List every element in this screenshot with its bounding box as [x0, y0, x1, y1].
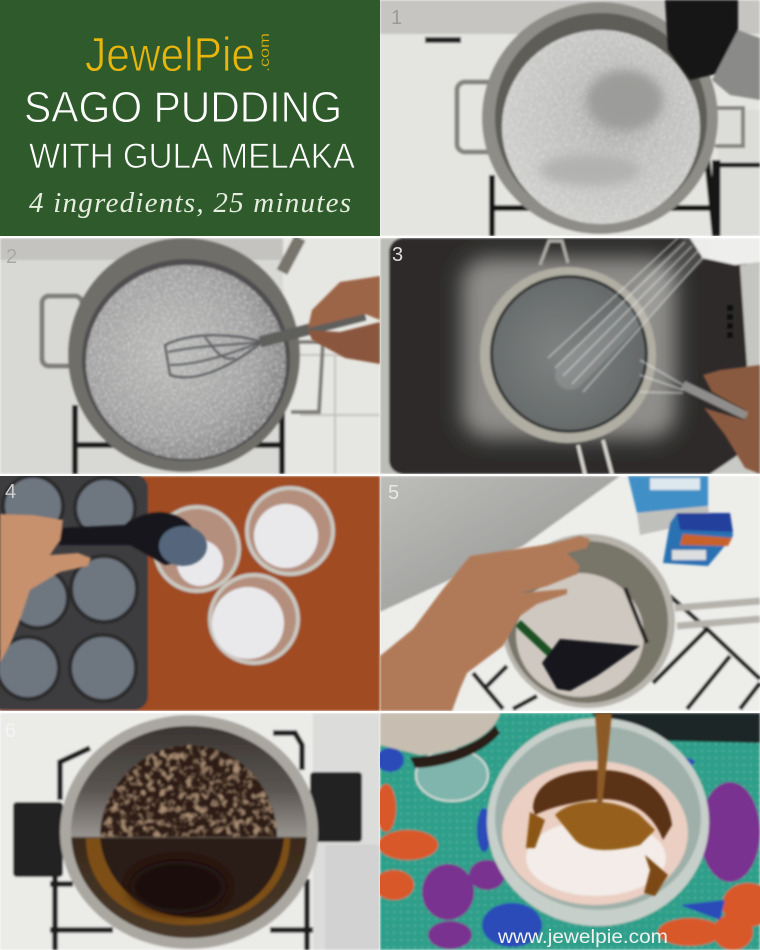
website url: www.jewelpie.com — [497, 927, 668, 948]
panel: step 1 photo — [380, 0, 760, 236]
caramel syrup pour — [526, 713, 672, 896]
hand — [380, 536, 590, 711]
panel: title — [0, 0, 380, 236]
pandan leaves — [518, 623, 640, 691]
water stream — [548, 238, 705, 393]
icon: step number 4: 4 — [5, 481, 16, 503]
icon: step number 2: 2 — [6, 246, 17, 268]
spoon and hand — [0, 512, 207, 663]
heading: sago pudding: SAGO PUDDING — [24, 83, 342, 132]
panel: step 4 photo — [0, 476, 380, 711]
icon: step number 3: 3 — [392, 244, 403, 266]
brand logo: JewelPie — [85, 29, 255, 82]
icon: step number 5: 5 — [388, 482, 399, 504]
brand logo: .com — [256, 33, 272, 72]
panel: step 5 photo — [380, 476, 760, 711]
icon: step number 1: 1 — [391, 7, 402, 29]
salt and milk packets — [628, 476, 733, 566]
panel: step 3 photo — [380, 238, 760, 474]
hand — [703, 365, 760, 474]
panel: step 6 photo — [0, 713, 380, 950]
subtitle: ingredients and time: 4 ingredients, 25 minutes — [29, 187, 351, 219]
heading: with gula melaka: WITH GULA MELAKA — [29, 137, 356, 176]
icon: step number 6: 6 — [5, 720, 16, 742]
panel: step 7 photo — [380, 713, 760, 950]
whisk and hand — [165, 276, 380, 377]
oven mitt and jar — [665, 0, 760, 100]
panel: step 2 photo — [0, 238, 380, 474]
